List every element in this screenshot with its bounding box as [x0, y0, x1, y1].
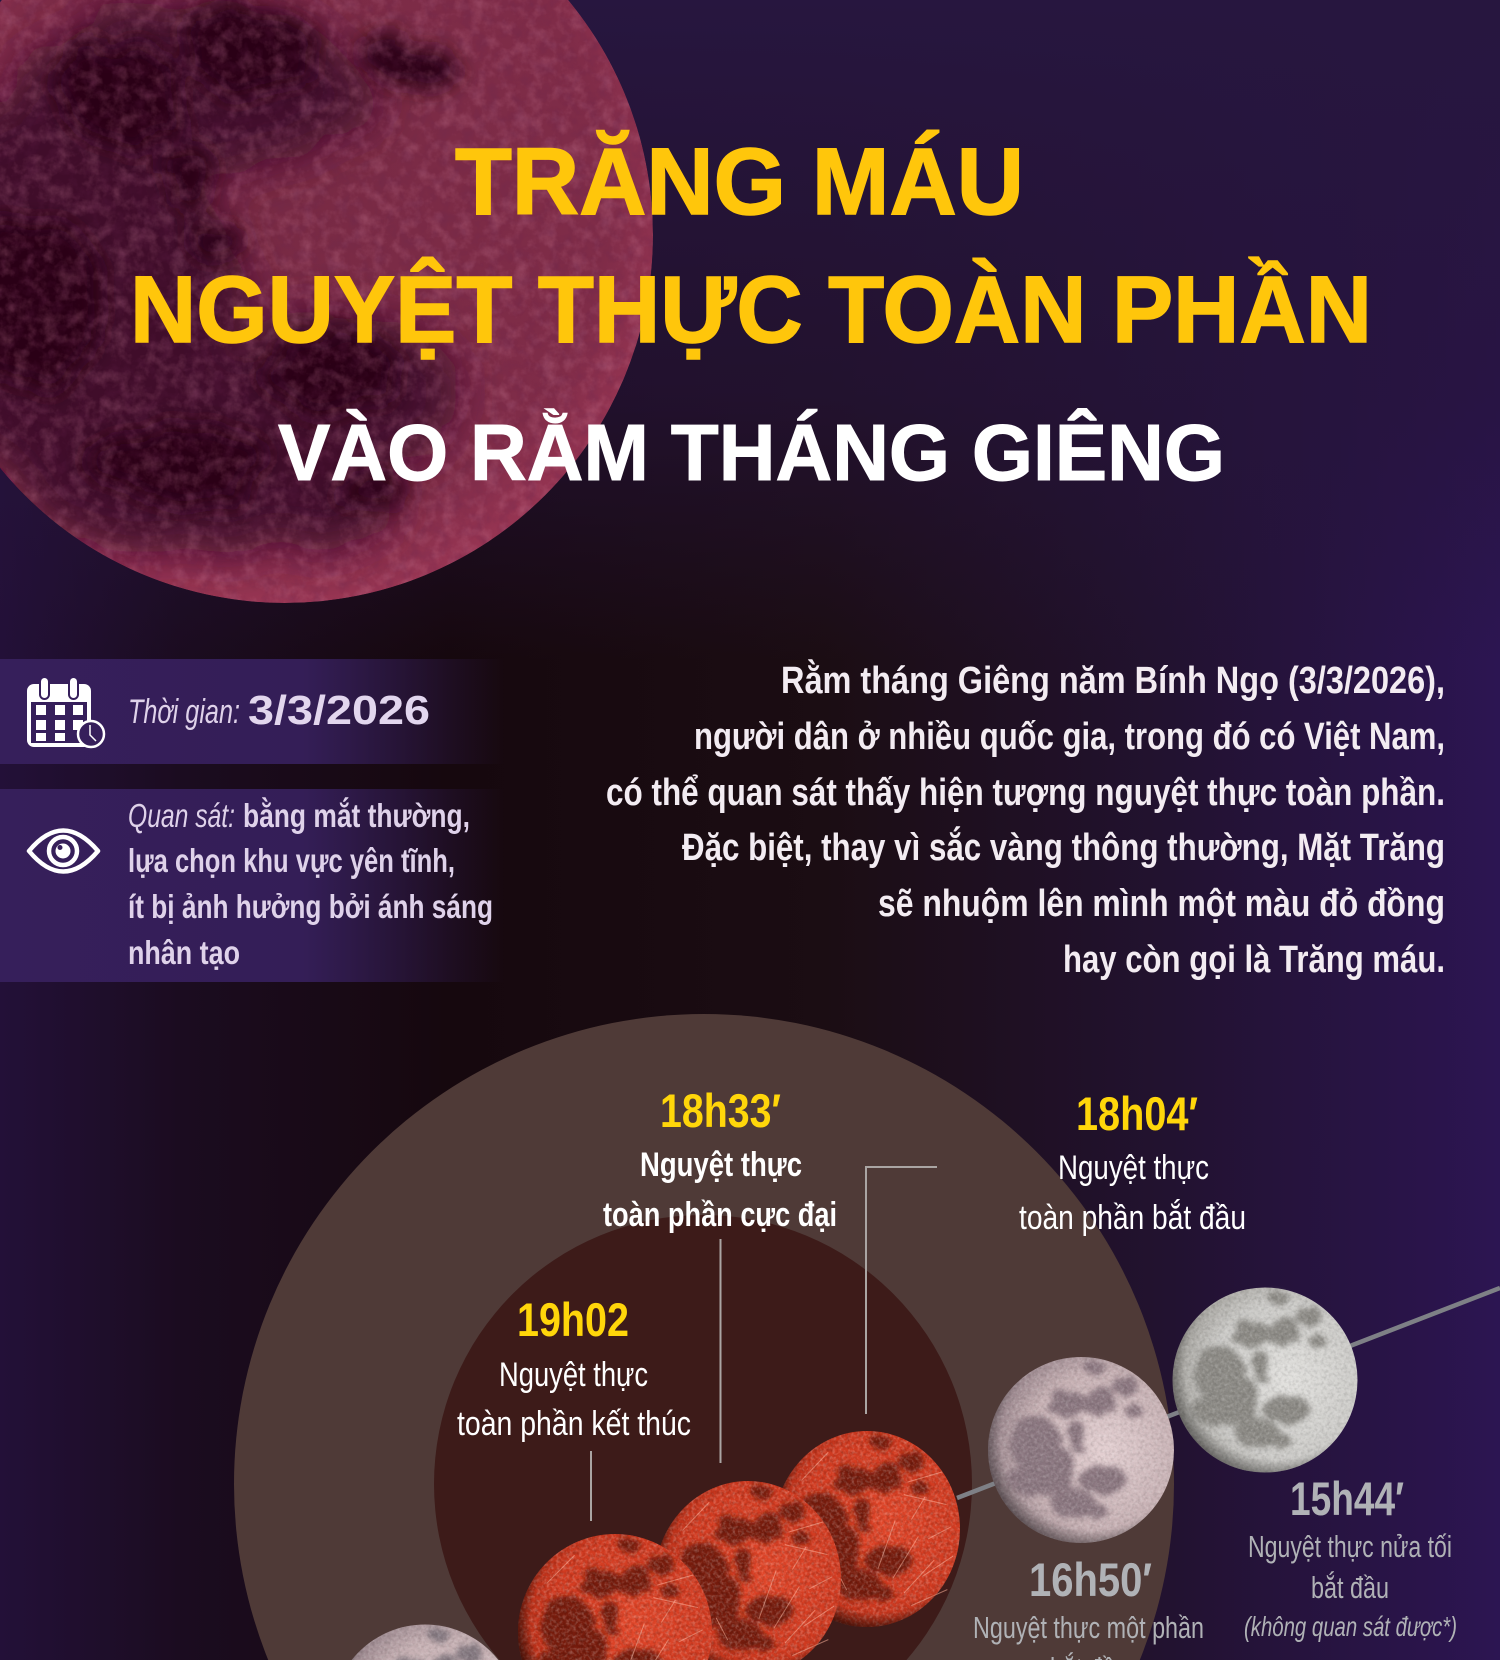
moon: pink 16h50 — [988, 1357, 1174, 1543]
label: 16h50 partial begins: Nguyệt thực một phần — [973, 1610, 1204, 1645]
leader lines — [591, 1167, 937, 1521]
time label: Thời gian: — [128, 693, 240, 731]
title line 1: TRĂNG MÁU — [455, 129, 1024, 235]
label: 19h02 totality ends: 19h02 — [517, 1293, 629, 1346]
label: 16h50 partial begins — [973, 1553, 1204, 1660]
observation text: lựa chọn khu vực yên tĩnh, — [128, 842, 455, 879]
label: 18h04 totality begins: 18h04′ — [1076, 1087, 1198, 1140]
label: 15h44 penumbral begins: bắt đầu — [1311, 1570, 1389, 1605]
title — [130, 129, 1372, 497]
observation text: bằng mắt thường, — [243, 797, 470, 834]
label: 18h04 totality begins: toàn phần bắt đầu — [1019, 1199, 1246, 1237]
observation text: Quan sát: — [128, 797, 235, 834]
deep maria of the backdrop moon — [0, 8, 452, 506]
label: 18h04 totality begins: Nguyệt thực — [1058, 1149, 1209, 1187]
panel: observation — [0, 789, 505, 982]
observation text — [128, 797, 493, 971]
moon orbit line — [957, 1288, 1500, 1498]
time value: 3/3/2026 — [248, 687, 430, 733]
label: 19h02 totality ends — [457, 1293, 691, 1443]
label: 15h44 penumbral begins — [1244, 1472, 1457, 1642]
panel: time — [0, 659, 505, 764]
moon: red 18h33 — [655, 1481, 841, 1660]
penumbra shadow circle — [234, 1014, 1174, 1660]
umbra shadow circle — [434, 1215, 972, 1660]
label: 18h33 maximum: 18h33′ — [660, 1084, 781, 1137]
label: 15h44 penumbral begins: 15h44′ — [1290, 1472, 1404, 1525]
moon: lower-left, partially hidden — [332, 1624, 518, 1660]
title line 2: NGUYỆT THỰC TOÀN PHẦN — [130, 257, 1372, 363]
intro paragraph — [606, 658, 1445, 981]
moon: red 18h04 — [774, 1431, 960, 1627]
label: 18h33 maximum: Nguyệt thực — [640, 1146, 802, 1184]
subtitle: VÀO RẰM THÁNG GIÊNG — [278, 408, 1225, 497]
label: 18h04 totality begins — [1019, 1087, 1246, 1237]
label: 18h33 maximum — [603, 1084, 837, 1234]
broad dim maria of the backdrop moon — [0, 5, 460, 560]
icon: calendar — [27, 677, 104, 747]
moon: red 19h02 — [518, 1534, 712, 1660]
moon: grey 15h44 — [1172, 1288, 1358, 1472]
label: 18h33 maximum: toàn phần cực đại — [603, 1196, 837, 1234]
observation text: ít bị ảnh hưởng bởi ánh sáng — [128, 888, 493, 925]
label: 19h02 totality ends: toàn phần kết thúc — [457, 1405, 691, 1443]
observation text: nhân tạo — [128, 934, 240, 971]
icon: eye — [29, 830, 98, 872]
blood moon backdrop — [0, 0, 660, 610]
label: 16h50 partial begins: 16h50′ — [1029, 1553, 1152, 1606]
label: 19h02 totality ends: Nguyệt thực — [499, 1356, 648, 1394]
